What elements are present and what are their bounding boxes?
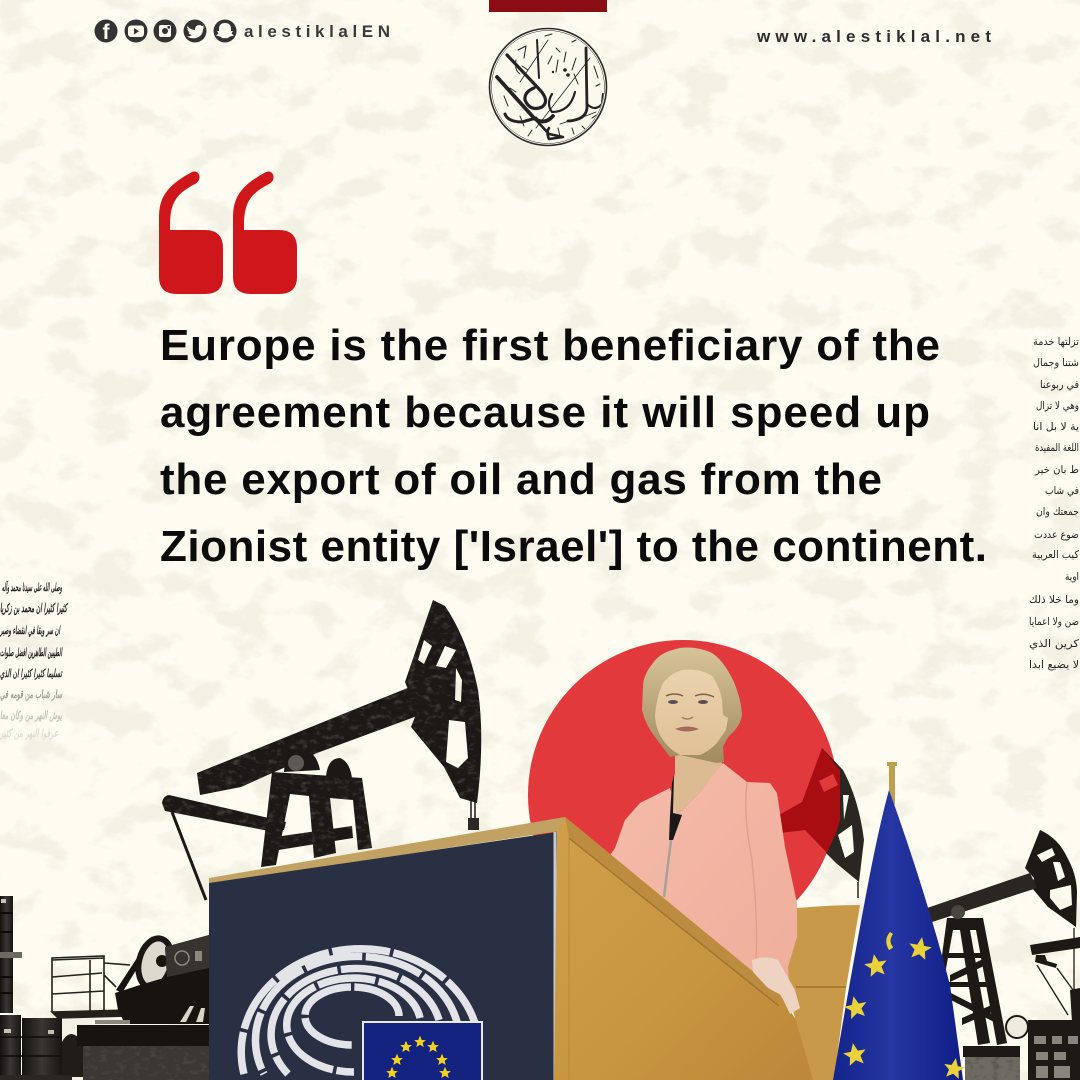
manuscript text: left: تسليما كثيرا كثيرا ان الذي [0,667,63,680]
light edge [554,832,556,1080]
pump jack: support frame [261,772,372,867]
manuscript text: left [0,580,69,740]
navy face [209,832,558,1080]
text: كثيرا كثيرا ان محمد بن زكريا [0,601,69,616]
manuscript text: right: وما خلا ذلك [1029,594,1079,606]
icon: twitter [184,20,206,42]
headline quote: the export of oil and gas from the [160,455,882,504]
left industrial machinery [0,896,209,1080]
neck [670,745,722,815]
flag cloth [833,790,963,1080]
pump jack: tail beam [162,795,286,831]
gearbox housing [95,935,209,1024]
logo: calligraphic seal [490,28,606,146]
EU flag [833,762,966,1080]
icon: facebook: f [102,21,110,44]
red circle [528,640,838,950]
manuscript text: right: ية لا بل انا [1033,421,1079,433]
headline quote: agreement because it will speed up [160,388,930,437]
manuscript text: left: عرفوا النهر من كثير [0,727,58,740]
pump jack: well rod [471,800,475,822]
icon: snapchat [214,20,236,42]
icon: youtube [124,20,148,42]
front podium: navy panel [209,817,566,1080]
platform railing [52,956,130,1018]
facial features [666,694,714,732]
manuscript text: right: لا يضيع ابدا [1029,659,1079,671]
manuscript text: right: ط بان خير [1034,464,1079,476]
icon: instagram [154,20,176,42]
manuscript text: left: يوش النهر من وكان معا [0,709,63,722]
top red tab [489,0,607,12]
manuscript text: left: سار شباب من قومه في [0,688,62,701]
pump jack: derrick frame [938,918,1007,1045]
European Parliament emblem [241,949,477,1074]
hand on podium [752,958,800,1014]
gold top edge [209,817,566,884]
headline quote [160,321,987,571]
headline quote: Zionist entity ['Israel'] to the continent. [160,522,987,571]
pump jack: walking beam [197,687,428,795]
horsehead dark part [822,748,864,882]
text: الطيبين الطاهرين افضل صلوات [0,646,63,659]
oil barrels [0,1015,84,1080]
pump jack: horsehead [1025,830,1077,927]
pump jack: tail rod [172,812,206,900]
flywheel [116,935,177,993]
manuscript text: right [1029,336,1079,671]
machinery base [77,1025,209,1080]
right pump jack [927,830,1080,1080]
zipper [664,840,671,897]
sleeve seam [746,782,756,958]
flag pole [887,762,897,805]
quotation mark [159,171,297,294]
text: وصلى الله على سيدنا محمد وآله [2,580,62,594]
jacket [600,763,797,1000]
large pump jack [162,600,481,900]
website url: www.alestiklal.net [756,27,991,46]
base machinery [963,1016,1080,1080]
social media bar [94,20,390,44]
face [655,670,728,755]
well rod [857,882,859,898]
hair [642,648,742,763]
pump jack: beam [927,873,1037,922]
front podium: wooden side [554,817,813,1080]
pump jack: gearbox [284,748,352,778]
pump jack: horsehead [405,600,481,803]
horsehead cut-outs [819,774,854,858]
manuscript text: right: كرين الذي [1029,638,1079,650]
social handle: alestiklalEN [244,22,390,41]
second pump jack [1030,928,1080,1022]
icon: facebook [94,20,118,44]
small pump jack in circle [779,748,864,898]
dark top [669,775,682,840]
EU flag panel [362,1021,483,1080]
headline quote: Europe is the first beneficiary of the [160,321,940,370]
manuscript text: left: ان سر وبقا في انقضاء وصبر [0,624,61,637]
rear wooden podium [780,905,860,1080]
oil drums stack [0,896,22,1013]
speaker: woman in pink jacket [600,648,797,1000]
flag stars [842,932,966,1080]
horsehead red part [779,748,840,853]
